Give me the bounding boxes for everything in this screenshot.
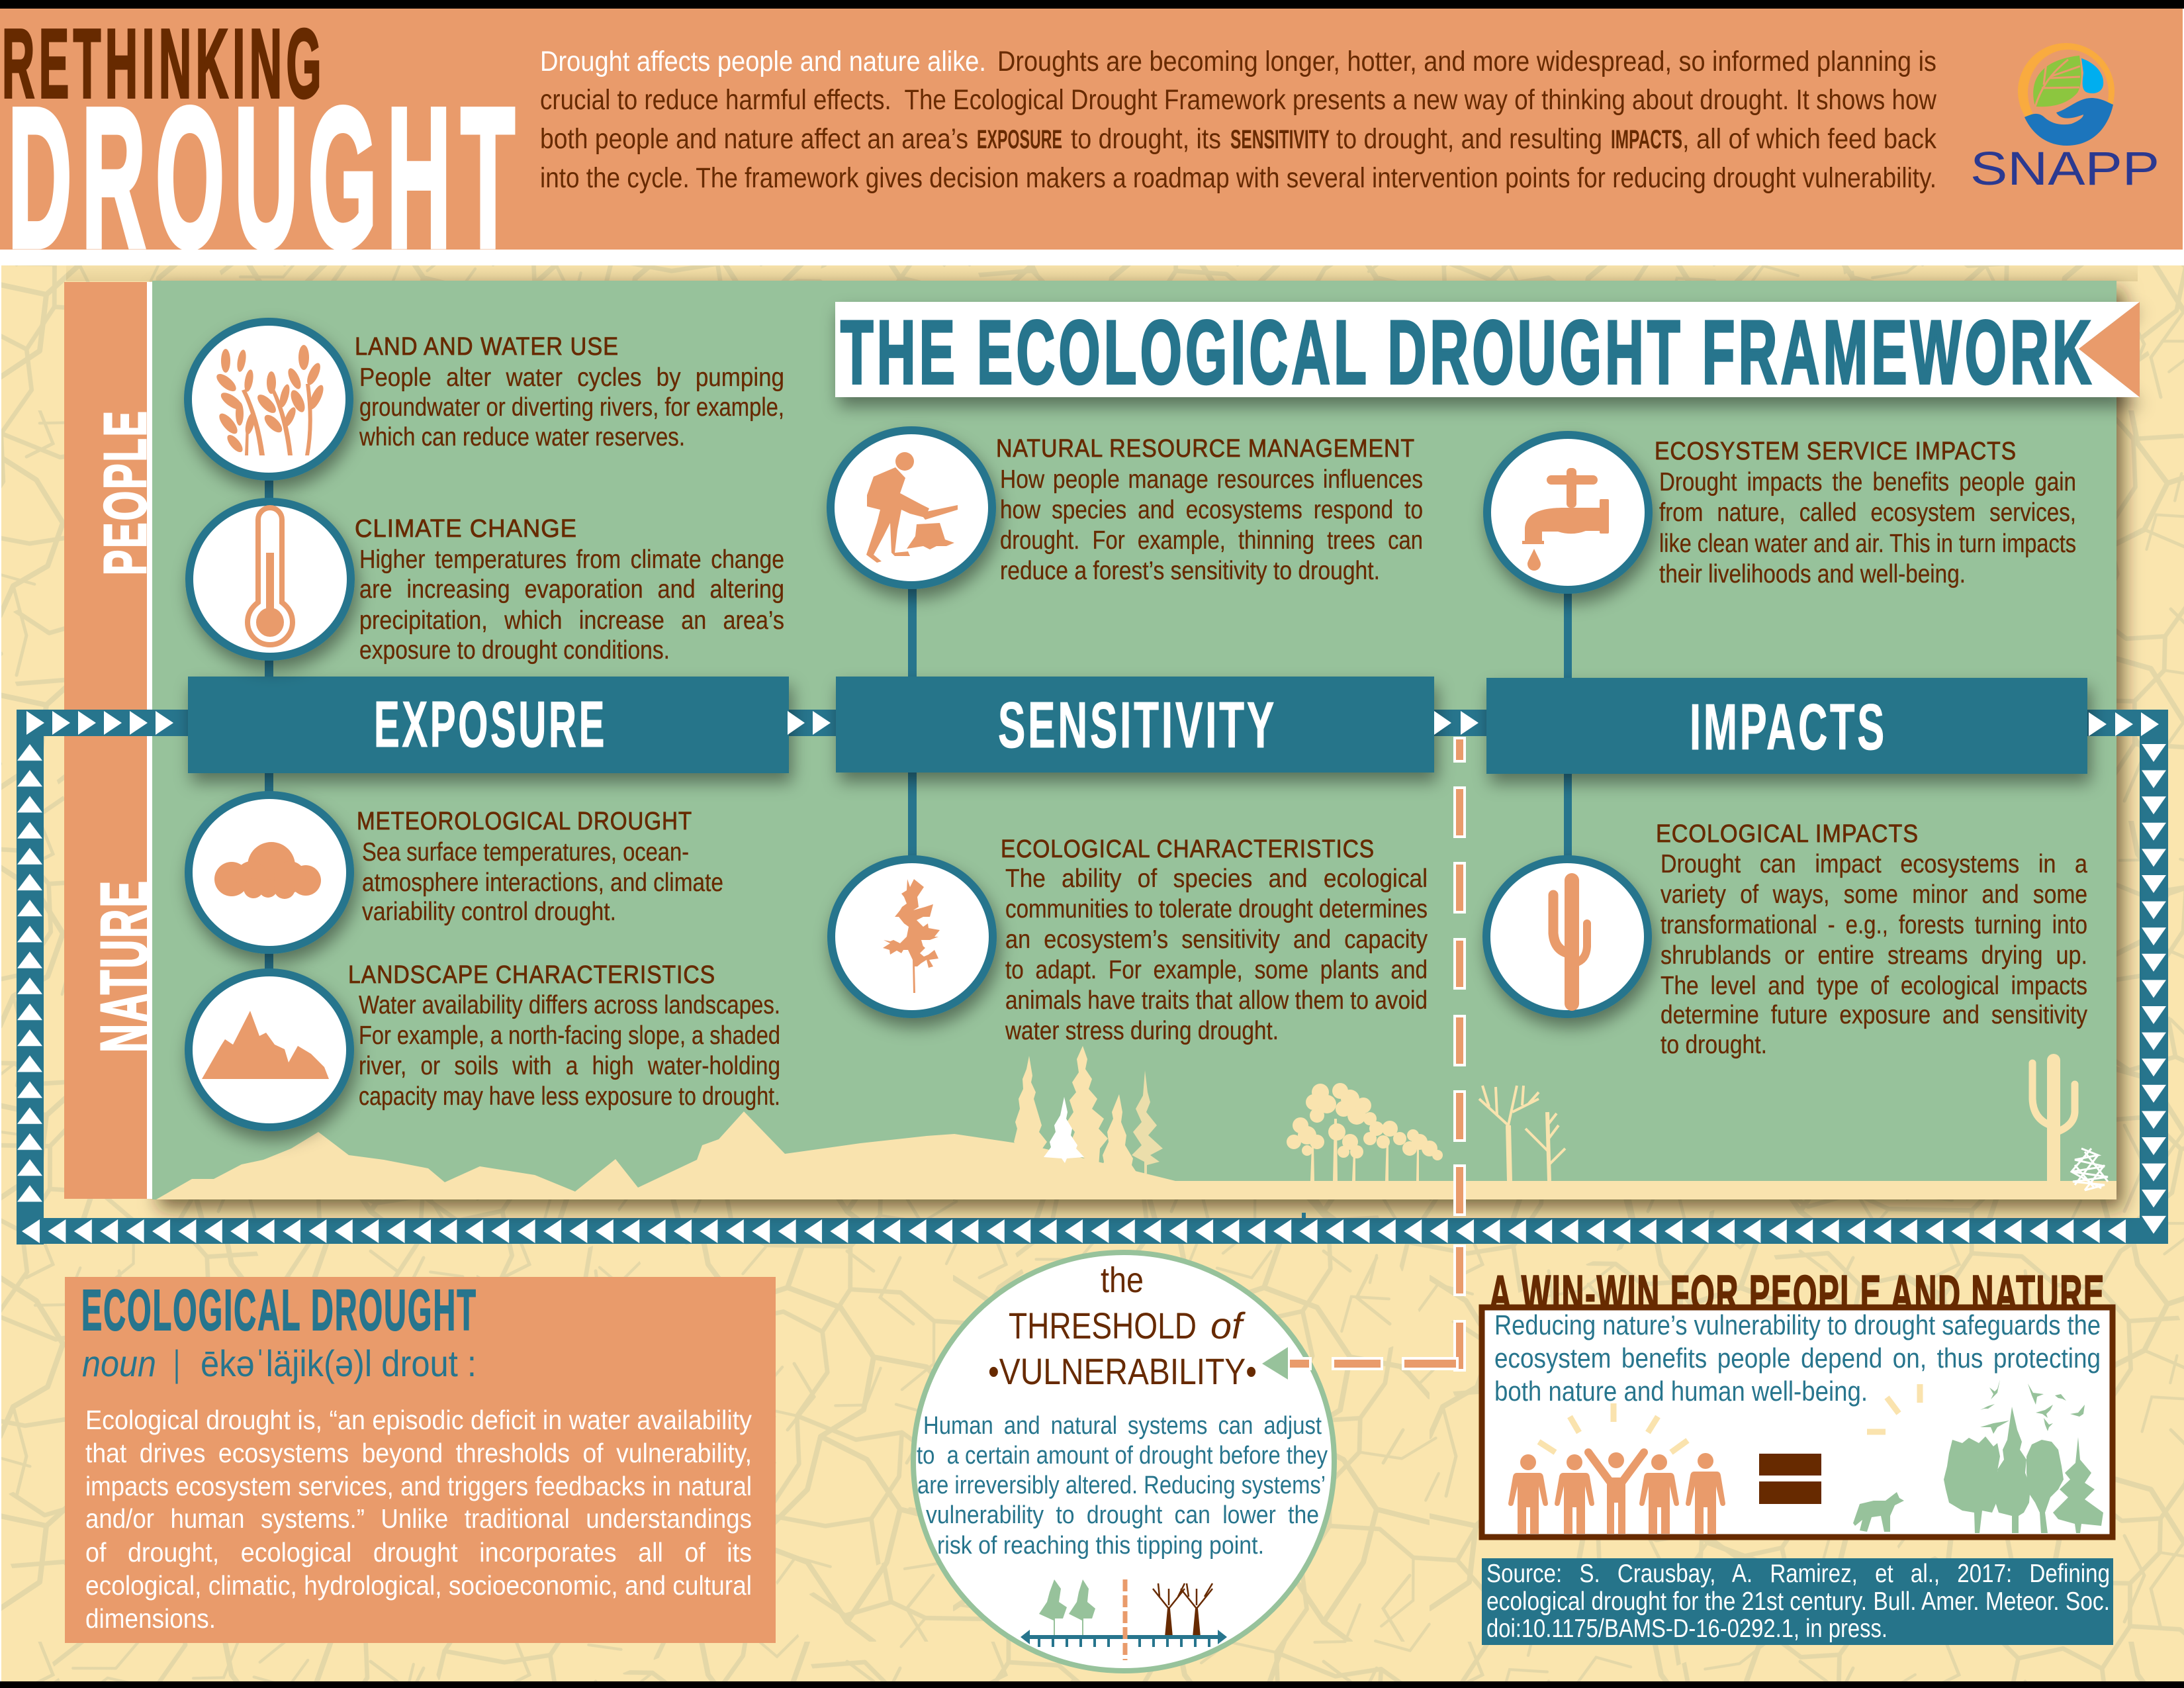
definition text: Ecological drought is, “an episodic deficit in water availability bbox=[85, 1405, 752, 1435]
text: natural resource management: drought. For example, thinning trees can bbox=[1000, 526, 1423, 555]
header intro text: Droughts are becoming longer, hotter, and more widespread, so informed planning is bbox=[997, 46, 1936, 77]
panel: threshold of vulnerability bbox=[913, 1252, 1334, 1671]
text: ecosystem service impacts: Drought impacts the benefits people gain bbox=[1659, 468, 2076, 496]
panel: header: DROUGHT bbox=[8, 66, 525, 289]
header intro text: EXPOSURE bbox=[977, 125, 1062, 154]
text: meteorological drought: METEOROLOGICAL DROUGHT bbox=[357, 808, 692, 835]
icon: faucet bbox=[1487, 435, 1649, 590]
text: climate change: CLIMATE CHANGE bbox=[355, 515, 577, 543]
text: natural resource management: reduce a forest’s sensitivity to drought. bbox=[1000, 557, 1380, 585]
icon: logger with chainsaw bbox=[831, 430, 992, 585]
header intro text: crucial to reduce harmful effects. The Ecological Drought Framework presents a new way of thinking about drought. It shows how bbox=[540, 84, 1937, 116]
text: ecological characteristics: water stress during drought. bbox=[1005, 1017, 1279, 1045]
text: land and water use: LAND AND WATER USE bbox=[355, 333, 619, 361]
text: ecosystem service impacts: their livelihoods and well-being. bbox=[1659, 560, 1966, 588]
text: meteorological drought: atmosphere interactions, and climate bbox=[362, 868, 723, 897]
header box: sensitivity bbox=[836, 677, 1434, 773]
icon: forest bbox=[1944, 1407, 2103, 1533]
win-win text: both nature and human well-being. bbox=[1494, 1376, 1868, 1407]
connector stems bbox=[265, 481, 1572, 972]
text: ecological characteristics: animals have traits that allow them to avoid bbox=[1005, 986, 1428, 1015]
text: ecosystem service impacts: like clean water and air. This in turn impacts bbox=[1659, 530, 2076, 558]
text: ecological characteristics: The ability of species and ecological bbox=[1005, 865, 1428, 893]
text: natural resource management: How people manage resources influences bbox=[1000, 465, 1423, 494]
definition text: of drought, ecological drought incorporates all of its bbox=[85, 1537, 752, 1568]
text: ecological impacts: ECOLOGICAL IMPACTS bbox=[1656, 820, 1919, 848]
header intro text bbox=[540, 46, 1937, 194]
header intro text: to drought, its bbox=[1071, 123, 1221, 155]
pronunciation: noun bbox=[82, 1342, 156, 1384]
text: landscape characteristics: Water availability differs across landscapes. bbox=[359, 991, 780, 1019]
definition text: and/or human systems.” Unlike traditional understandings bbox=[85, 1503, 752, 1534]
text: ecological characteristics: communities to tolerate drought determines bbox=[1005, 895, 1428, 923]
arrow: feedback loop bands bbox=[17, 710, 2168, 1244]
header intro text: , all of which feed back bbox=[1682, 123, 1936, 155]
text: ecological impacts: The level and type of ecological impacts bbox=[1661, 972, 2087, 1000]
text: climate change bbox=[355, 515, 784, 665]
header intro text: IMPACTS bbox=[1611, 125, 1682, 154]
arrow: to threshold bbox=[1262, 1347, 1457, 1380]
threshold text bbox=[917, 1412, 1328, 1560]
people nature side band bbox=[64, 282, 161, 1199]
text: landscape characteristics: LANDSCAPE CHARACTERISTICS bbox=[348, 961, 715, 989]
header intro text: SENSITIVITY bbox=[1230, 125, 1330, 154]
text: ecological impacts: determine future exposure and sensitivity bbox=[1661, 1001, 2087, 1029]
header box: impacts bbox=[1486, 678, 2087, 774]
text: climate change: are increasing evaporation and altering bbox=[359, 575, 784, 604]
definition text: dimensions. bbox=[85, 1603, 216, 1634]
threshold text: risk of reaching this tipping point. bbox=[937, 1532, 1264, 1560]
text: ecological characteristics bbox=[1001, 835, 1428, 1045]
label: nature: NATURE bbox=[87, 879, 161, 1053]
heading: threshold bbox=[988, 1260, 1257, 1392]
hills and ground bbox=[156, 1111, 2116, 1199]
heading: threshold: •VULNERABILITY• bbox=[988, 1350, 1257, 1392]
arrow: chevrons bbox=[17, 711, 2169, 1243]
header box: impacts: IMPACTS bbox=[1690, 690, 1887, 763]
text: climate change: precipitation, which increase an area’s bbox=[359, 606, 784, 635]
panel: ecological drought definition bbox=[65, 1277, 776, 1643]
icon: thermometer bbox=[189, 502, 351, 657]
conifer trees bbox=[1014, 1046, 1163, 1177]
icon: cloud bbox=[189, 795, 350, 950]
definition text: that drives ecosystems beyond thresholds of vulnerability, bbox=[85, 1438, 752, 1468]
heading: threshold: of bbox=[1210, 1305, 1246, 1346]
label: people: PEOPLE bbox=[93, 409, 159, 575]
win-win text bbox=[1494, 1309, 2101, 1407]
header box: exposure: EXPOSURE bbox=[374, 688, 607, 761]
icon: tree leaf bbox=[831, 859, 993, 1014]
header box: sensitivity: SENSITIVITY bbox=[998, 688, 1277, 761]
text: ecological impacts: variety of ways, some minor and some bbox=[1661, 880, 2087, 909]
bare trees bbox=[1479, 1086, 1565, 1181]
text: meteorological drought bbox=[357, 808, 723, 926]
icon: people bbox=[1508, 1452, 1725, 1534]
text: climate change: Higher temperatures from climate change bbox=[359, 545, 784, 574]
text: ecological characteristics: ECOLOGICAL CHARACTERISTICS bbox=[1001, 835, 1375, 863]
header intro text: both people and nature affect an area’s bbox=[540, 123, 968, 155]
text: ecological characteristics: to adapt. For example, some plants and bbox=[1005, 956, 1428, 984]
text: ecological characteristics: an ecosystem’s sensitivity and capacity bbox=[1005, 925, 1428, 954]
text: meteorological drought: variability control drought. bbox=[362, 898, 616, 926]
panel: header bbox=[0, 9, 2183, 289]
text: land and water use bbox=[355, 333, 784, 451]
saguaro cactus bbox=[2032, 1060, 2075, 1181]
definition text: impacts ecosystem services, and triggers feedbacks in natural bbox=[85, 1471, 752, 1501]
text: ecological impacts: Drought can impact ecosystems in a bbox=[1661, 850, 2087, 878]
definition text: ecological, climatic, hydrological, socioeconomic, and cultural bbox=[85, 1570, 752, 1601]
landscape silhouette bbox=[156, 1046, 2116, 1199]
equals sign bbox=[1759, 1454, 1821, 1504]
text: ecological impacts: shrublands or entire streams drying up. bbox=[1661, 941, 2087, 970]
arrow: horizontal link bands bbox=[17, 710, 2168, 736]
threshold text: Human and natural systems can adjust bbox=[923, 1412, 1322, 1440]
heading: threshold: the bbox=[1101, 1260, 1144, 1300]
heading: ecological drought: ECOLOGICAL DROUGHT bbox=[81, 1278, 477, 1342]
threshold text: vulnerability to drought can lower the bbox=[926, 1501, 1319, 1529]
pronunciation: ēkəˈläjik(ə)l drout : bbox=[201, 1342, 477, 1384]
heading: threshold: THRESHOLD bbox=[1009, 1305, 1197, 1346]
text: ecosystem service impacts: ECOSYSTEM SERVICE IMPACTS bbox=[1655, 438, 2017, 465]
threshold text: to a certain amount of drought before they bbox=[917, 1442, 1328, 1470]
source citation bbox=[1482, 1558, 2113, 1645]
text: meteorological drought: Sea surface temperatures, ocean- bbox=[362, 838, 689, 867]
icon: wheat bbox=[188, 322, 349, 477]
text: ecological impacts: to drought. bbox=[1661, 1031, 1767, 1059]
acacia trees bbox=[1287, 1083, 1443, 1181]
white tree bbox=[1044, 1097, 1084, 1163]
win-win text: ecosystem benefits people depend on, thus protecting bbox=[1494, 1342, 2101, 1374]
text: natural resource management: NATURAL RESOURCE MANAGEMENT bbox=[996, 435, 1415, 463]
source citation: doi:10.1175/BAMS-D-16-0292.1, in press. bbox=[1486, 1615, 1888, 1643]
icon: birds bbox=[1980, 1380, 2085, 1434]
text: landscape characteristics: For example, a north-facing slope, a shaded bbox=[359, 1021, 780, 1050]
pronunciation: | bbox=[173, 1342, 180, 1384]
definition text bbox=[85, 1405, 752, 1634]
title: rethinking drought bbox=[2, 9, 525, 289]
text: ecosystem service impacts bbox=[1655, 438, 2076, 588]
text: ecological impacts bbox=[1656, 820, 2087, 1059]
text: land and water use: which can reduce water reserves. bbox=[359, 423, 685, 451]
text: landscape characteristics bbox=[348, 961, 780, 1111]
header box: exposure bbox=[188, 677, 789, 773]
icon: mountain bbox=[189, 972, 350, 1127]
threshold text: are irreversibly altered. Reducing systems’ bbox=[917, 1472, 1326, 1499]
header intro text: into the cycle. The framework gives decision makers a roadmap with several intervention points for reducing drought vulnerability. bbox=[540, 162, 1936, 194]
header intro text: to drought, and resulting bbox=[1336, 123, 1602, 155]
text: climate change: exposure to drought conditions. bbox=[359, 636, 670, 665]
pronunciation bbox=[82, 1342, 477, 1384]
text: natural resource management: how species and ecosystems respond to bbox=[1000, 496, 1423, 524]
win-win text: Reducing nature’s vulnerability to drought safeguards the bbox=[1494, 1309, 2101, 1340]
text: ecosystem service impacts: from nature, called ecosystem services, bbox=[1659, 498, 2076, 527]
icon: wolf bbox=[1853, 1492, 1904, 1532]
logo: SNAPP bbox=[1970, 43, 2160, 195]
icon: cactus bbox=[1486, 859, 1648, 1014]
text: ecological impacts: transformational - e.g., forests turning into bbox=[1661, 911, 2087, 939]
arrow: dashed line bbox=[1455, 738, 1465, 1370]
title: rethinking drought: RETHINKING bbox=[2, 9, 326, 118]
panel: framework bbox=[17, 281, 2169, 1243]
text: landscape characteristics: river, or soils with a high water-holding bbox=[359, 1052, 780, 1080]
text: land and water use: People alter water cycles by pumping bbox=[359, 363, 784, 392]
text: landscape characteristics: capacity may have less exposure to drought. bbox=[359, 1082, 780, 1111]
header intro text: Drought affects people and nature alike. bbox=[540, 46, 986, 77]
threshold scale chart bbox=[1021, 1579, 1227, 1660]
text: land and water use: groundwater or diverting rivers, for example, bbox=[359, 393, 784, 422]
logo: SNAPP: SNAPP bbox=[1970, 143, 2160, 195]
text: natural resource management bbox=[996, 435, 1423, 585]
tumbleweed bbox=[2071, 1149, 2108, 1190]
panel: win-win bbox=[1482, 1264, 2113, 1537]
sun rays bbox=[1539, 1384, 1920, 1452]
